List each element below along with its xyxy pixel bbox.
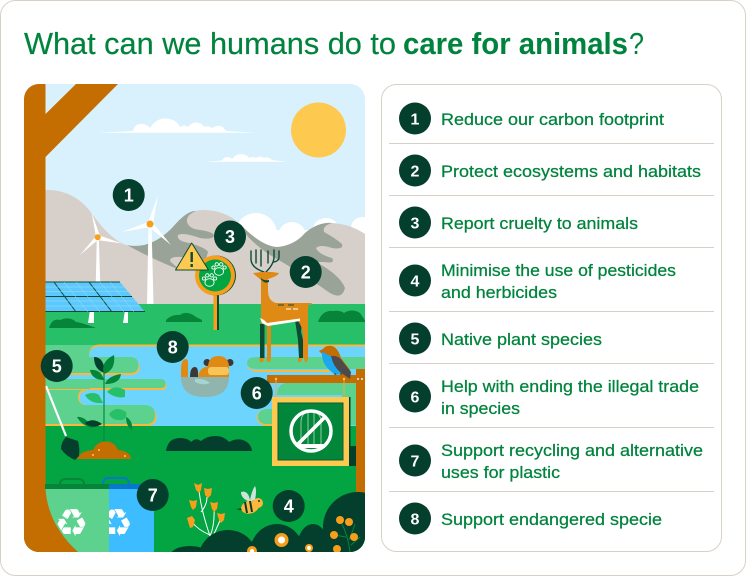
list item 8: 8 xyxy=(411,512,420,528)
badge 3 xyxy=(214,220,246,252)
badge 6 xyxy=(241,377,273,409)
ground xyxy=(46,304,365,345)
icon: plant sapling xyxy=(77,355,132,459)
trunk and branch xyxy=(24,84,118,552)
bottom right dark bushes with flowers xyxy=(172,492,365,552)
clouds behind mountains xyxy=(238,213,365,247)
list item 4: and herbicides xyxy=(441,283,557,302)
list item 4 xyxy=(399,261,676,302)
list item 6 xyxy=(399,377,699,418)
icon: bee xyxy=(236,486,263,516)
badge 8 xyxy=(157,331,189,363)
list item 7: Support recycling and alternative xyxy=(441,441,703,460)
icon: solar panel xyxy=(45,282,145,323)
bushes on ground xyxy=(49,310,366,328)
badge 5 xyxy=(41,350,73,382)
icon: recycling bins xyxy=(45,478,154,552)
badge 7 xyxy=(137,479,169,511)
list item 3: Report cruelty to animals xyxy=(441,214,638,233)
icon: sun xyxy=(291,102,346,158)
list item 8: Support endangered specie xyxy=(441,510,662,529)
list item 8 xyxy=(399,502,662,534)
badge 7: 7 xyxy=(148,486,158,506)
panel: action list xyxy=(382,84,722,552)
icon: orange flowers xyxy=(187,483,225,538)
lower grass xyxy=(24,426,365,552)
mountains xyxy=(45,190,365,310)
list item 5 xyxy=(399,322,602,354)
list item 6: in species xyxy=(441,399,520,418)
list item 6: 6 xyxy=(411,390,420,406)
badge 6: 6 xyxy=(252,384,262,404)
list item 4: Minimise the use of pesticides xyxy=(441,261,676,280)
icon: shrubs in grass xyxy=(166,436,252,451)
list item 5: Native plant species xyxy=(441,330,602,349)
list item 1: 1 xyxy=(411,112,420,128)
clouds xyxy=(98,118,287,162)
icon: beaver in water xyxy=(181,356,234,397)
icon: no caged birds sign xyxy=(267,369,365,504)
title: What can we humans do to xyxy=(24,26,396,61)
list item 2: 2 xyxy=(411,164,420,180)
badge 2 xyxy=(290,256,322,288)
icon: shovel xyxy=(46,386,79,460)
list item 2 xyxy=(399,154,701,186)
icon: warning sign and paw signpost xyxy=(176,243,236,330)
badge 1 xyxy=(113,179,145,211)
list item 3 xyxy=(399,206,638,238)
list item 3: 3 xyxy=(411,216,420,232)
list item 5: 5 xyxy=(411,332,420,348)
illustration panel xyxy=(24,84,365,552)
list item 6: Help with ending the illegal trade xyxy=(441,377,699,396)
deer xyxy=(251,250,312,362)
title xyxy=(24,26,644,61)
icon: wind turbines xyxy=(80,195,171,304)
badge 4 xyxy=(273,490,305,522)
icon: recycling bins: ♻ xyxy=(99,501,133,545)
badge 8: 8 xyxy=(168,338,178,358)
badge 3: 3 xyxy=(225,227,235,247)
title: ? xyxy=(629,26,644,61)
list item 1 xyxy=(399,102,664,134)
lake xyxy=(45,344,365,426)
badge 2: 2 xyxy=(301,262,311,282)
list item 1: Reduce our carbon footprint xyxy=(441,110,664,129)
icon: recycling bins: ♻ xyxy=(54,501,89,545)
list item 7: uses for plastic xyxy=(441,463,561,482)
title: care for animals xyxy=(403,26,628,61)
list item 4: 4 xyxy=(411,274,420,290)
icon: bird xyxy=(319,346,351,379)
badge 4: 4 xyxy=(284,496,294,516)
list item 2: Protect ecosystems and habitats xyxy=(441,162,701,181)
list item 7: 7 xyxy=(411,454,420,470)
badge 1: 1 xyxy=(124,186,134,206)
badge 5: 5 xyxy=(52,356,62,376)
list item 7 xyxy=(399,441,703,482)
